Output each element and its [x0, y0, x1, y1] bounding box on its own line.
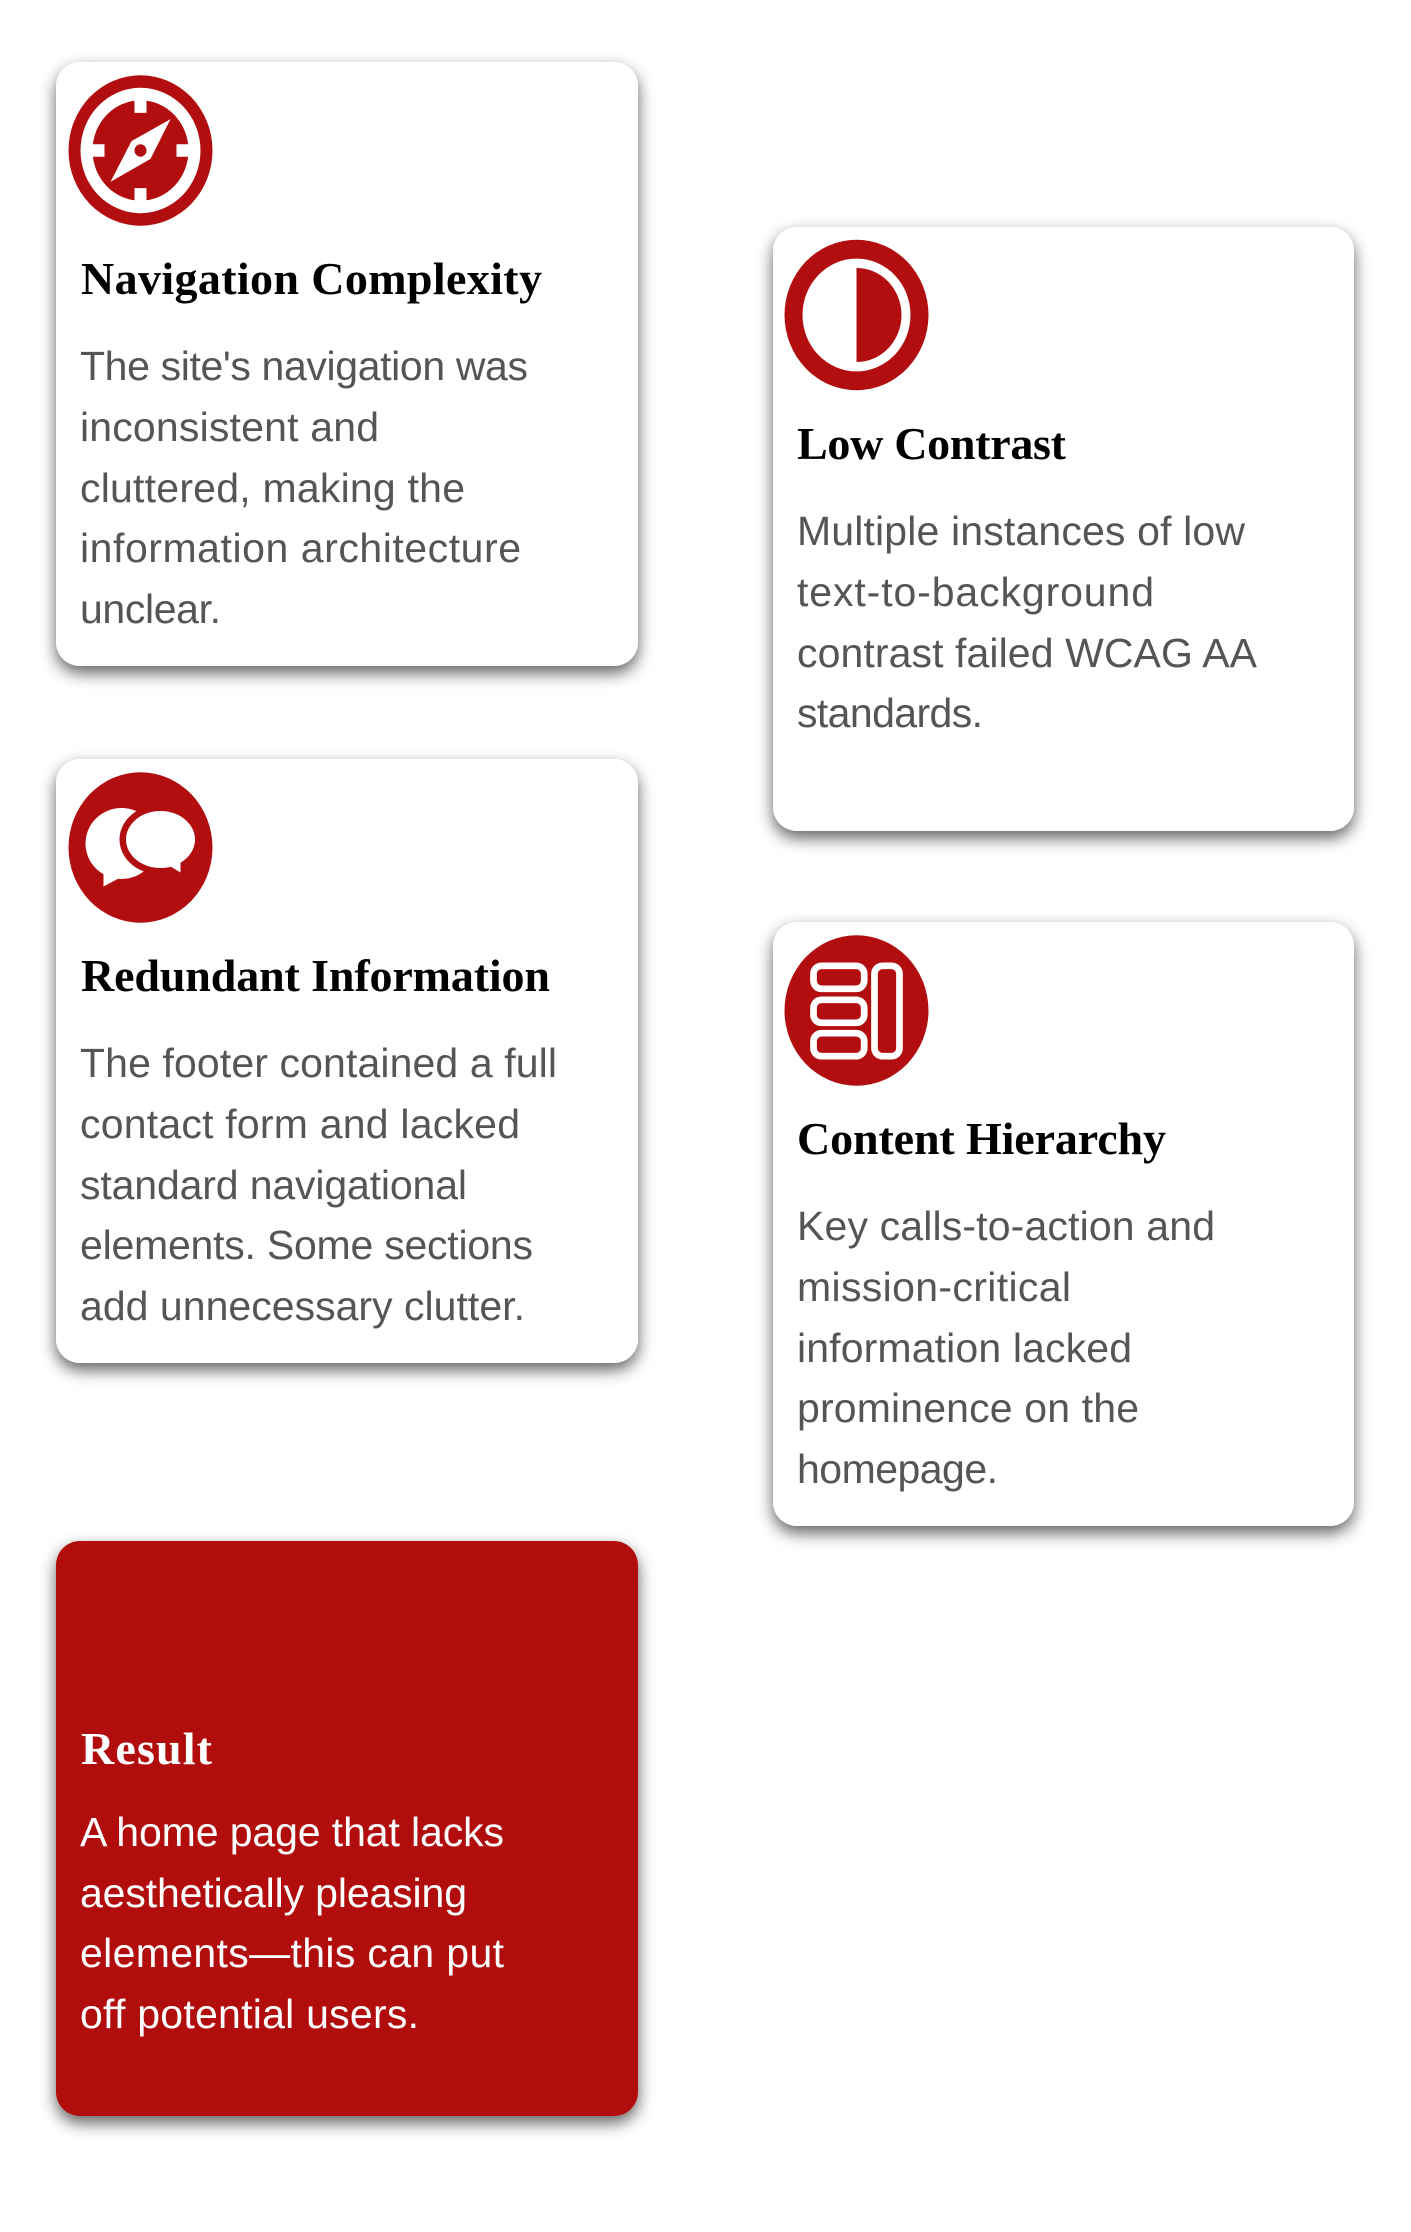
text: result description [80, 1809, 505, 2037]
text: contrast description: Multiple instances of low [797, 508, 1245, 554]
text: redundant description: standard navigational [80, 1162, 467, 1208]
text: hierarchy description: homepage. [797, 1446, 998, 1492]
text: redundant description: elements. Some sections [80, 1222, 533, 1268]
text: hierarchy description: information lacked [797, 1325, 1132, 1371]
text: navigation description: cluttered, making the [80, 465, 465, 511]
panel: navigation complexity [56, 62, 638, 666]
heading: low contrast: Low Contrast [797, 418, 1067, 469]
text: navigation description: unclear. [80, 586, 221, 632]
text: contrast description [797, 508, 1258, 736]
text: contrast description: standards. [797, 690, 983, 736]
text: result description: elements—this can put [80, 1930, 505, 1976]
text: redundant description: The footer contained a full [80, 1040, 557, 1086]
text: redundant description [80, 1040, 557, 1329]
text: result description: aesthetically pleasing [80, 1870, 467, 1916]
icon: compass [68, 75, 212, 226]
icon: contrast circle [784, 240, 928, 390]
text: hierarchy description: prominence on the [797, 1385, 1139, 1431]
icon: layout blocks [784, 935, 928, 1086]
text: result description: A home page that lacks [80, 1809, 504, 1855]
text: redundant description: contact form and lacked [80, 1101, 520, 1147]
heading: redundant information: Redundant Information [81, 950, 550, 1001]
panel: result [56, 1541, 638, 2116]
heading: navigation complexity: Navigation Complexity [81, 253, 542, 304]
text: hierarchy description: mission-critical [797, 1264, 1071, 1310]
text: contrast description: contrast failed WCAG AA [797, 630, 1258, 676]
text: redundant description: add unnecessary clutter. [80, 1283, 525, 1329]
panel: redundant information [56, 759, 638, 1363]
text: hierarchy description [797, 1203, 1215, 1492]
heading: result: Result [81, 1723, 213, 1774]
text: hierarchy description: Key calls-to-action and [797, 1203, 1215, 1249]
text: navigation description: information architecture [80, 525, 521, 571]
text: result description: off potential users. [80, 1991, 419, 2037]
text: navigation description [80, 343, 528, 632]
icon: speech bubbles [68, 772, 212, 923]
panel: content hierarchy [773, 922, 1354, 1526]
panel: low contrast [773, 227, 1354, 831]
text: contrast description: text-to-background [797, 569, 1154, 615]
heading: content hierarchy: Content Hierarchy [797, 1113, 1166, 1164]
text: navigation description: The site's navigation was [80, 343, 528, 389]
text: navigation description: inconsistent and [80, 404, 379, 450]
